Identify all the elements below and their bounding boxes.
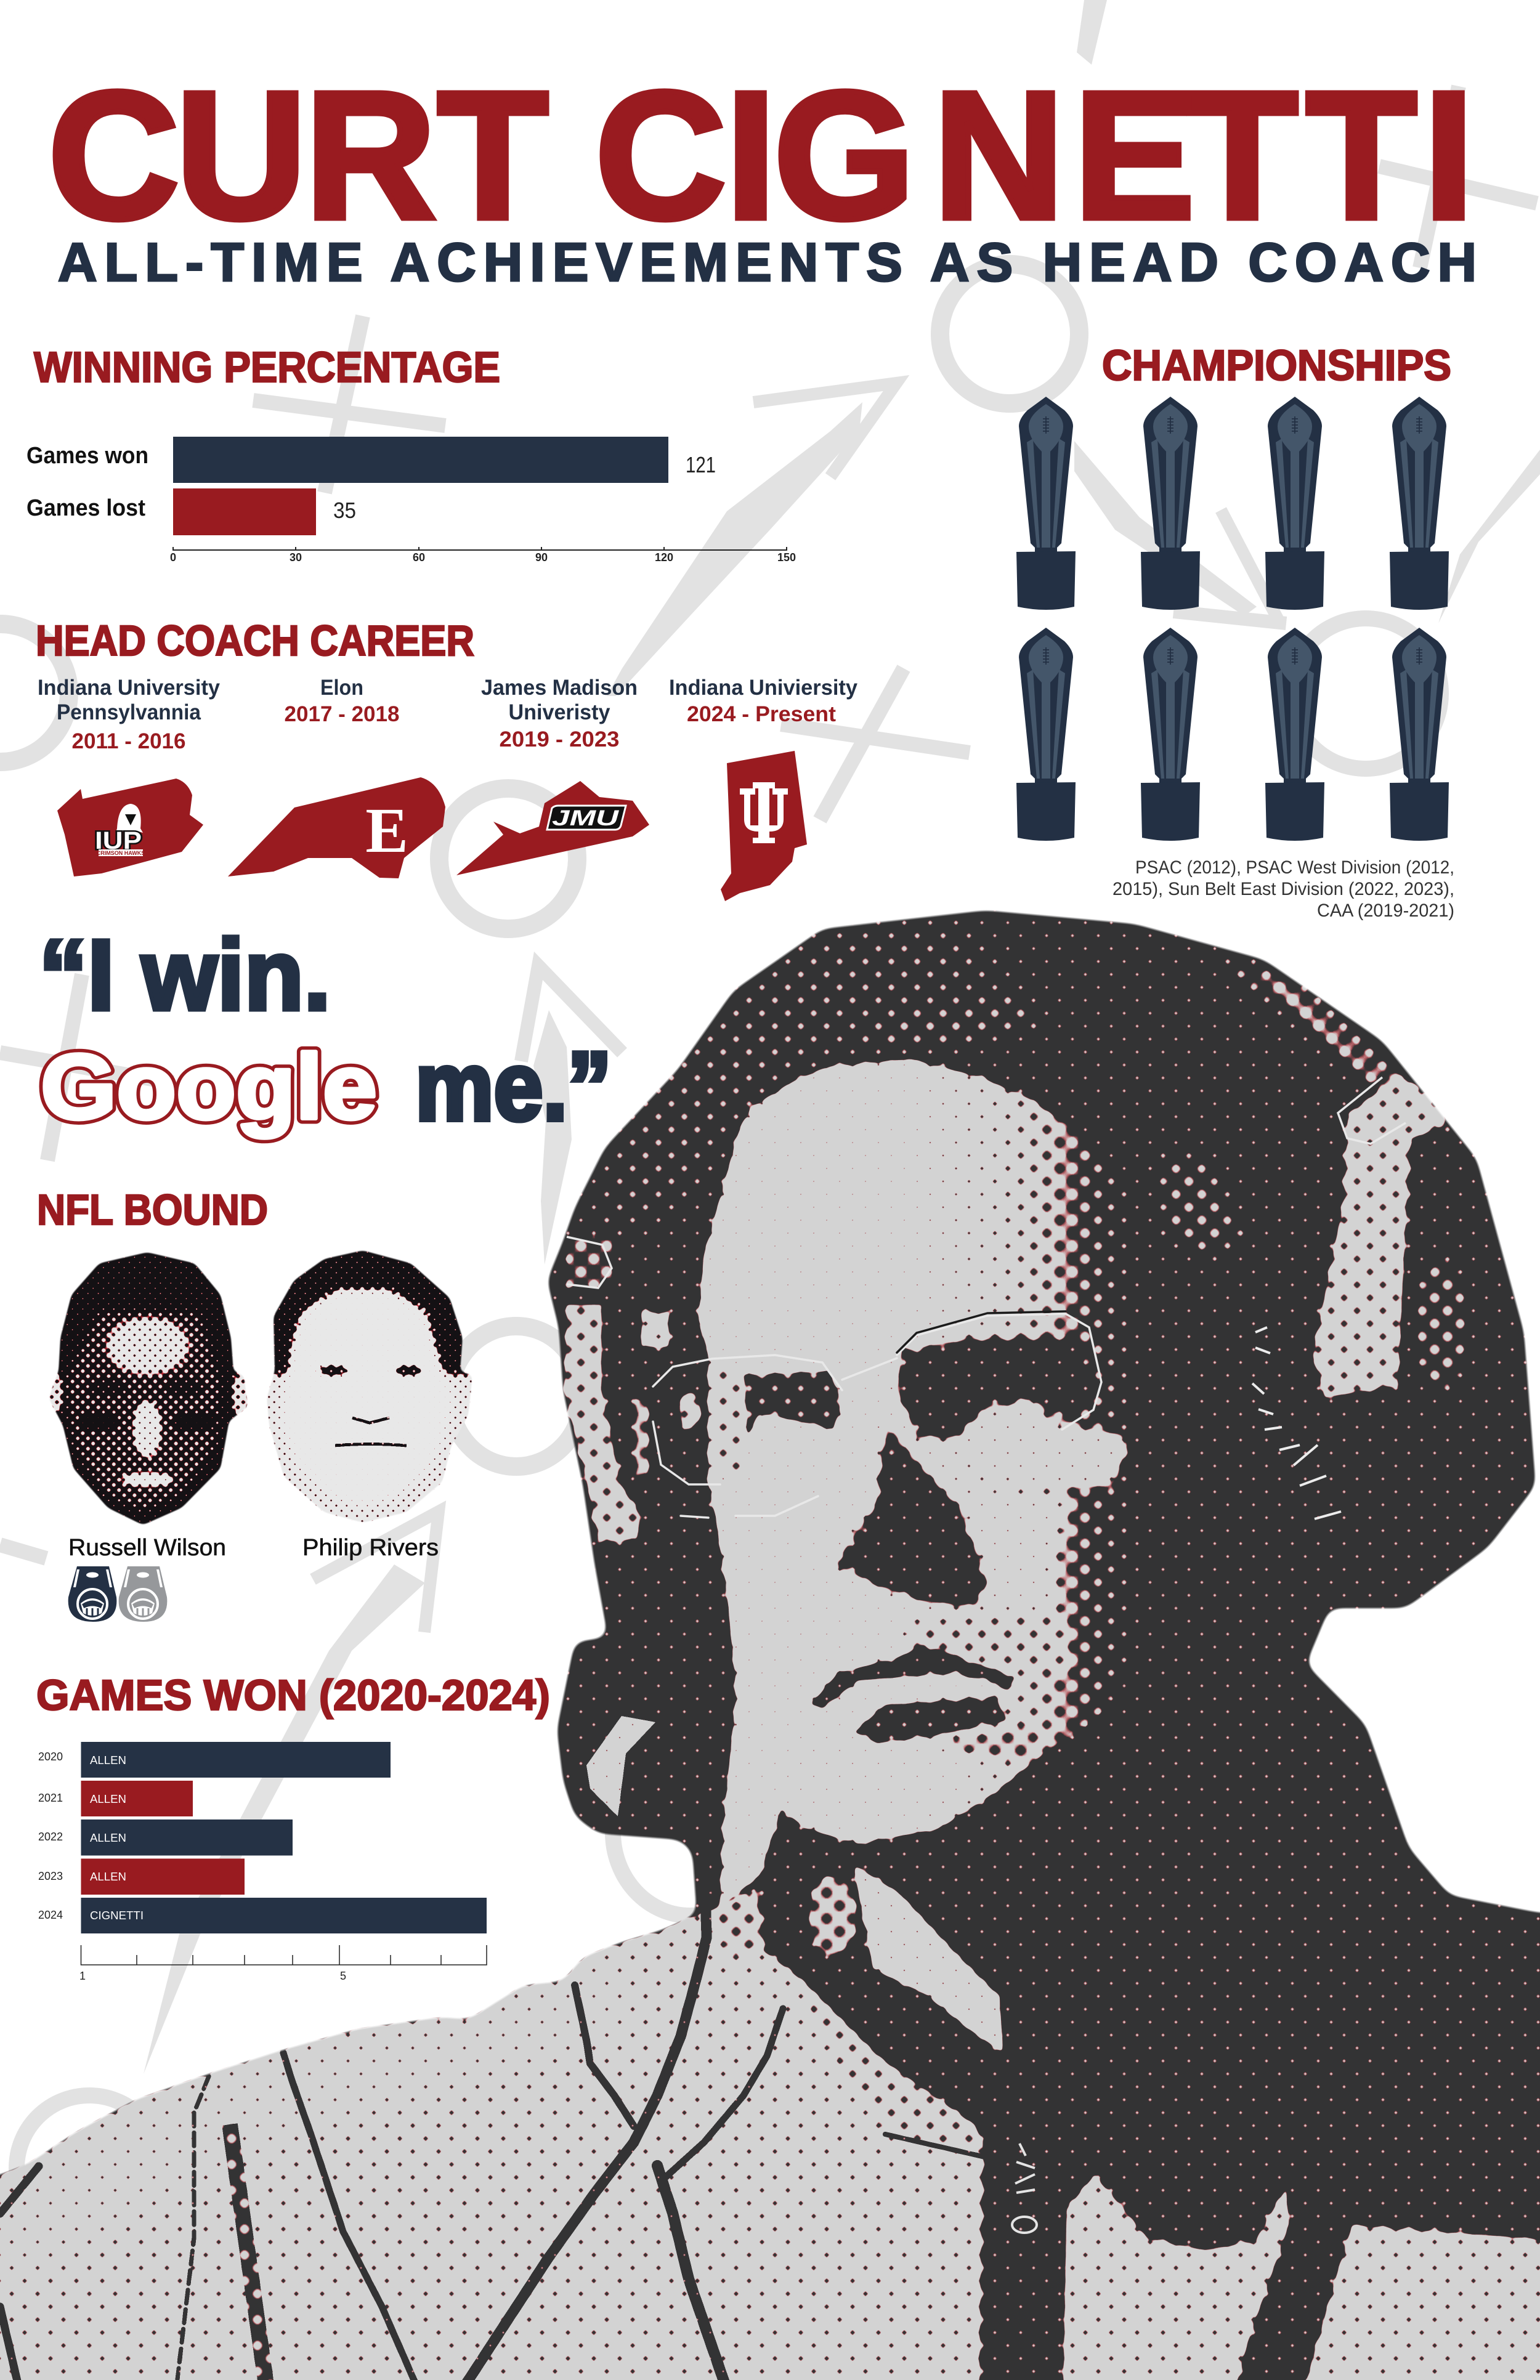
heading: winning percentage: WINNING PERCENTAGE — [34, 343, 500, 391]
career stop: Elon: E — [365, 795, 408, 866]
halftone screen — [0, 862, 1540, 2380]
panel: games won 2020-2024 — [36, 1671, 550, 1982]
career stop: Indiana University: Indiana Univiersity — [669, 676, 858, 700]
portrait tones: hair and headset highlights — [563, 924, 1467, 1544]
bar: 2022 — [38, 1819, 293, 1855]
axis: games: 120 — [655, 551, 673, 564]
bar: 2020: ALLEN — [90, 1754, 126, 1767]
bar: 2022: ALLEN — [90, 1832, 126, 1844]
axis: games: 30 — [290, 551, 302, 564]
career stop: Elon: Elon — [320, 676, 363, 700]
bar: 2024: CIGNETTI — [90, 1909, 144, 1922]
text: list of titles: CAA (2019-2021) — [1317, 901, 1454, 921]
heading: NFL bound: NFL BOUND — [37, 1186, 268, 1234]
bar: 2021 — [38, 1781, 193, 1816]
bar: 2022: 2022 — [38, 1831, 63, 1843]
portrait: earpiece ridges — [1252, 1327, 1341, 1519]
quote: me.” — [415, 1032, 612, 1141]
career stop: Indiana University — [669, 676, 858, 901]
bar: 2024 — [38, 1898, 487, 1933]
axis: games won: 5 — [340, 1970, 346, 1982]
career stop: Indiana University Pennsylvania: Indiana University — [38, 676, 221, 700]
icon: championship rings — [68, 1566, 167, 1622]
quote: “I win. — [39, 918, 331, 1031]
panel: championships — [1016, 341, 1454, 921]
trophies: eight championship trophies — [1016, 397, 1449, 841]
bar: 2020: 2020 — [38, 1751, 63, 1763]
quote: Google — [41, 1035, 377, 1138]
quote — [39, 918, 612, 1141]
career stop: James Madison: James Madison — [481, 676, 638, 700]
career stop: Indiana University Pennsylvania: CRIMSON HAWKS — [97, 850, 145, 856]
portrait: glasses frames — [653, 1311, 1101, 1518]
text: list of titles: 2015), Sun Belt East Division (2022, 2023), — [1112, 879, 1454, 899]
career stop: Indiana University Pennsylvania: 2011 - 2016 — [71, 729, 186, 753]
quote: Google — [41, 1035, 377, 1138]
heading: games won: GAMES WON (2020-2024) — [36, 1671, 550, 1719]
text: list of titles — [1112, 857, 1454, 921]
text: list of titles: PSAC (2012), PSAC West Division (2012, — [1135, 857, 1454, 878]
bar: 2023: 2023 — [38, 1870, 63, 1882]
axis: games: 90 — [535, 551, 548, 564]
bar: games lost — [26, 488, 356, 535]
axis: games won: 1 — [79, 1970, 86, 1982]
face: Philip Rivers — [259, 1232, 487, 1540]
bar: games won: Games won — [26, 443, 148, 469]
career stop: James Madison — [456, 676, 649, 875]
bar: games won — [26, 437, 716, 483]
bar: 2023: ALLEN — [90, 1871, 126, 1883]
career stop: Indiana University Pennsylvania — [38, 676, 221, 876]
title: CURT CIGNETTI — [48, 54, 1474, 257]
face: Russell Wilson — [37, 1232, 259, 1540]
portrait: headset clips — [567, 1077, 1406, 1288]
bar: 2020 — [38, 1742, 391, 1778]
heading: head coach career: HEAD COACH CAREER — [36, 617, 474, 665]
axis: games won — [79, 1945, 487, 1982]
portrait tones: headset cords and sweater seams — [0, 1836, 987, 2380]
bar: games lost: Games lost — [26, 495, 145, 521]
panel: head coach career — [36, 617, 858, 901]
heading: championships: CHAMPIONSHIPS — [1102, 341, 1451, 389]
bar: 2024: 2024 — [38, 1909, 63, 1921]
bar: games won: 121 — [686, 452, 716, 477]
career stop: Elon: 2017 - 2018 — [285, 702, 399, 726]
career stop: Indiana University Pennsylvania: IUP — [95, 827, 142, 854]
career stop: James Madison: JMU — [552, 806, 619, 830]
bar: games lost: 35 — [333, 498, 356, 523]
career stop: James Madison: 2019 - 2023 — [499, 727, 620, 751]
axis: games: 0 — [170, 551, 176, 564]
axis: games: 60 — [413, 551, 425, 564]
axis: games: 150 — [777, 551, 796, 564]
bar: 2021: 2021 — [38, 1792, 63, 1804]
bar: 2023 — [38, 1859, 245, 1895]
axis: games — [170, 547, 796, 564]
career stop: Indiana University: 2024 - Present — [687, 702, 836, 726]
portrait tones: sweater — [0, 1865, 1540, 2380]
bar: 2021: ALLEN — [90, 1793, 126, 1805]
portrait tones: face — [586, 1059, 1146, 1906]
career stop: James Madison: Univeristy — [509, 700, 610, 724]
portrait: zipper pull — [1012, 2143, 1037, 2233]
label: Philip Rivers: Philip Rivers — [302, 1535, 439, 1561]
career stop: Elon — [228, 676, 445, 878]
panel: NFL bound — [37, 1186, 487, 1622]
portrait: halftone photo of Curt Cignetti in a headset — [0, 862, 1540, 2380]
label: Russell Wilson: Russell Wilson — [68, 1535, 226, 1561]
career stop: Indiana University Pennsylvania: Pennsylvannia — [57, 700, 201, 724]
panel: winning percentage — [26, 343, 796, 564]
subtitle: ALL-TIME ACHIEVEMENTS AS HEAD COACH — [58, 232, 1477, 293]
